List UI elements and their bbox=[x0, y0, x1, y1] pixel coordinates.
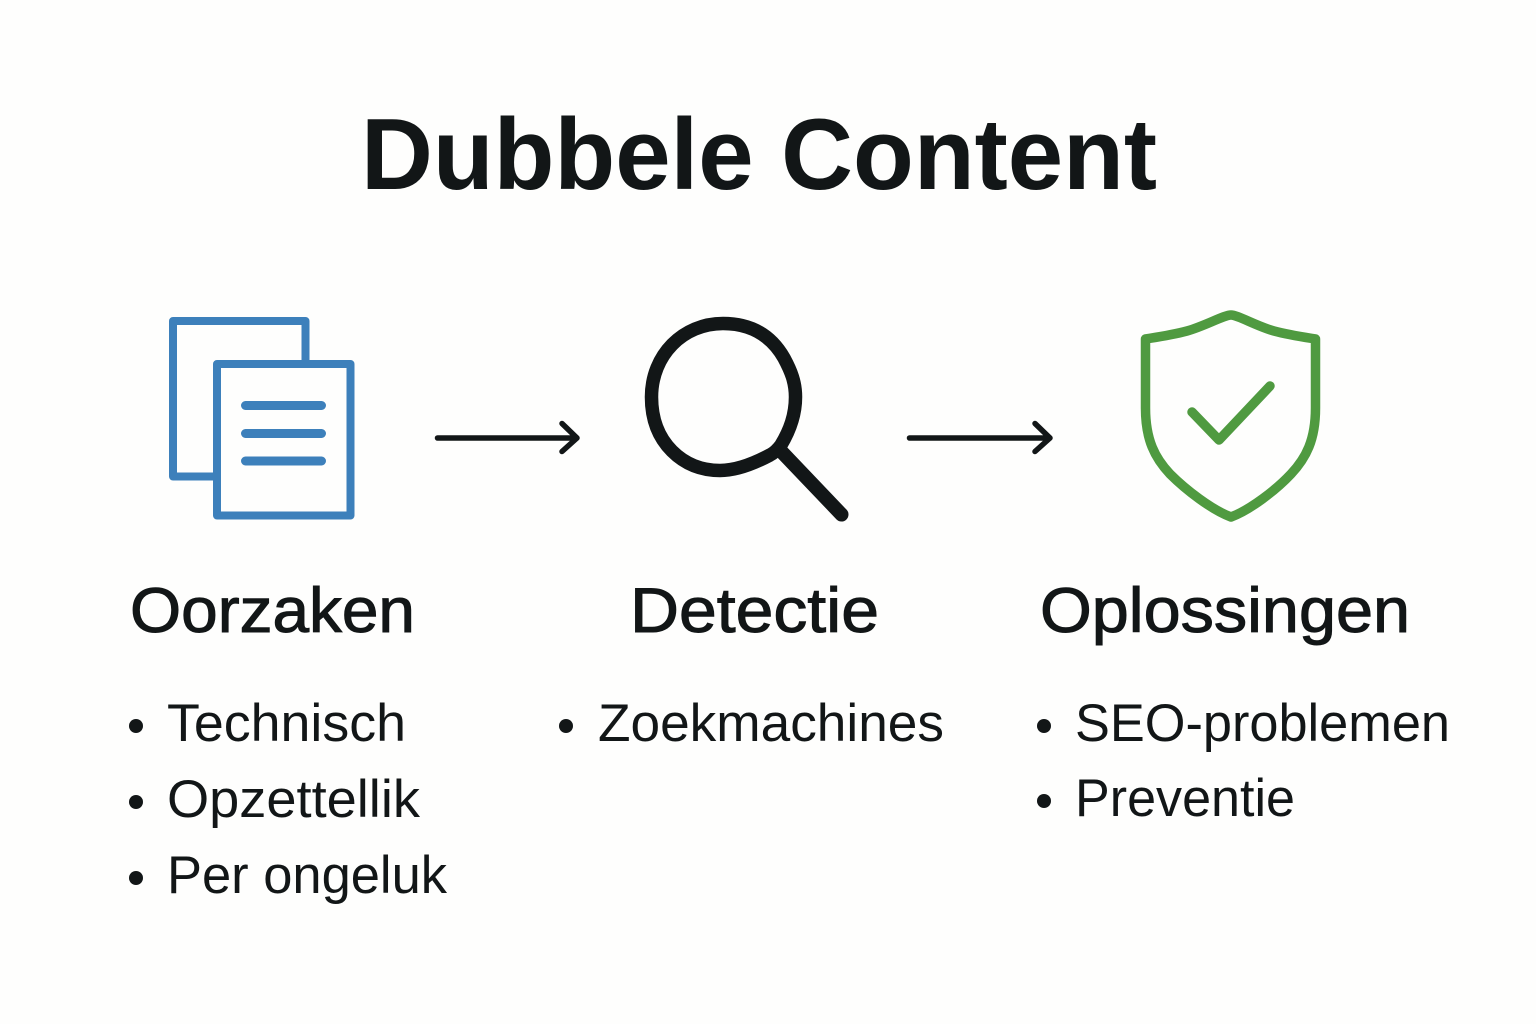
list: oplossingen: SEO-problemen bbox=[1075, 694, 1450, 753]
list: detectie: Zoekmachines bbox=[598, 694, 944, 753]
icon: magnifying glass bbox=[652, 324, 842, 514]
list: oorzaken: Per ongeluk bbox=[167, 846, 448, 905]
list: oorzaken: Technisch bbox=[167, 694, 406, 753]
arrow: oorzaken to detectie bbox=[438, 424, 577, 452]
title: Dubbele Content bbox=[361, 99, 1157, 211]
panel: detectie bbox=[559, 324, 944, 753]
panel: oorzaken bbox=[129, 321, 448, 905]
heading: detectie: Detectie bbox=[630, 576, 879, 646]
heading: oorzaken: Oorzaken bbox=[130, 576, 415, 646]
icon: documents bbox=[173, 321, 350, 516]
arrow: detectie to oplossingen bbox=[910, 424, 1050, 452]
list: oorzaken: Opzettellik bbox=[167, 770, 421, 829]
list: oorzaken bbox=[129, 694, 448, 905]
heading: oplossingen: Oplossingen bbox=[1040, 576, 1410, 646]
icon: shield with check bbox=[1146, 315, 1316, 517]
panel: oplossingen bbox=[1037, 315, 1450, 828]
list: oplossingen bbox=[1037, 694, 1450, 828]
list: oplossingen: Preventie bbox=[1075, 769, 1295, 828]
